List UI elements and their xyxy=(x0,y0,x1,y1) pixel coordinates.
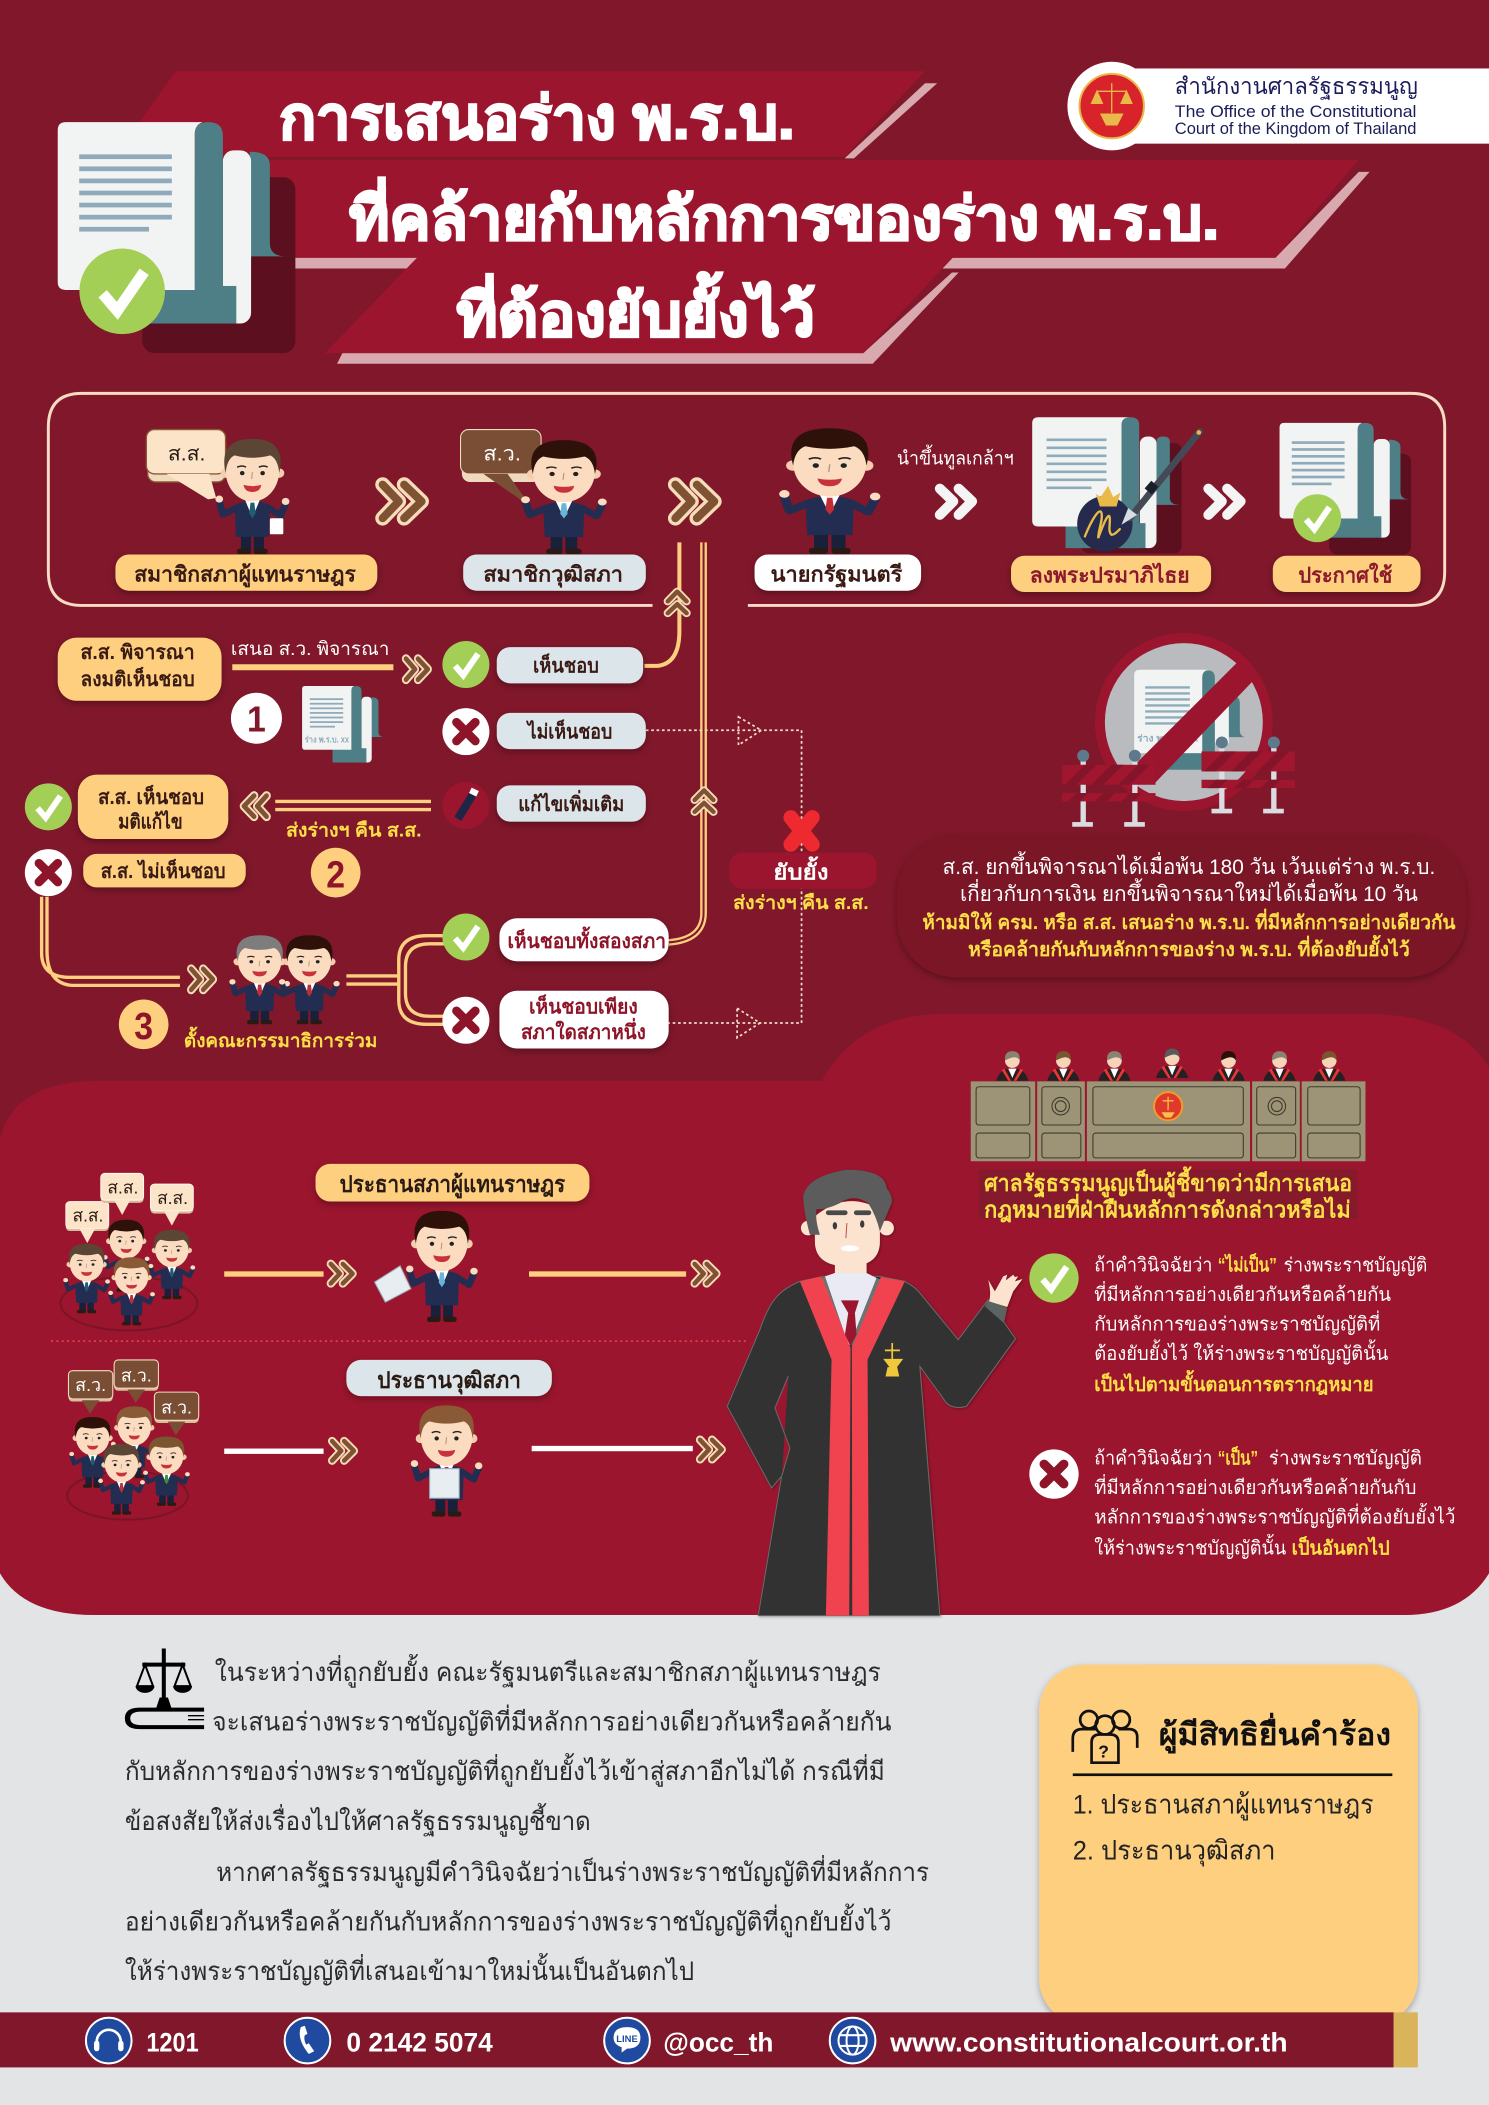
card: who may petition: 2. ประธานวุฒิสภา xyxy=(1073,1835,1276,1866)
step 1: House approves xyxy=(58,638,222,701)
step: senator with speech bubble: ส.ว. xyxy=(483,443,521,465)
contact: website xyxy=(830,2018,1288,2063)
logo: Office of the Constitutional Court xyxy=(1067,62,1489,150)
card: who may petition xyxy=(1039,1665,1418,2024)
title text: ที่คล้ายกับหลักการของร่าง พ.ร.บ. xyxy=(349,177,1219,252)
step 2: return to House: ส.ส. ไม่เห็นชอบ xyxy=(101,858,226,883)
body text xyxy=(125,1654,929,1986)
House president xyxy=(316,1164,589,1322)
group: Senators: ส.ว. xyxy=(75,1375,106,1395)
icon: people with question marks: ? xyxy=(1098,1741,1109,1761)
icon: promulgated document xyxy=(1280,423,1411,554)
outcomes: approve / disapprove / amend: แก้ไขเพิ่มเติม xyxy=(518,789,624,816)
contact: hotline xyxy=(86,2018,199,2063)
dotted veto lines xyxy=(646,717,802,1038)
number 1 xyxy=(231,693,282,744)
step 2: return to House: มติแก้ไข xyxy=(118,809,183,833)
group: Senators: ส.ว. xyxy=(121,1365,152,1385)
step 2: return to House: ส.ส. เห็นชอบ xyxy=(98,784,204,809)
verdict: is a similar bill: ให้ร่างพระราชบัญญัตินั้น xyxy=(1094,1534,1286,1560)
arrow: Senate president to court xyxy=(532,1440,722,1459)
step: senator with speech bubble xyxy=(461,430,607,554)
committee outcomes: สภาใดสภาหนึ่ง xyxy=(521,1017,646,1044)
verdict: not a similar bill: กับหลักการของร่างพระราชบัญญัติที่ xyxy=(1094,1310,1380,1335)
dark red panel: constitutional court xyxy=(0,1014,1489,1615)
step 2: return to House: ส่งร่างฯ คืน ส.ส. xyxy=(286,819,422,840)
outcomes: approve / disapprove / amend xyxy=(442,641,646,829)
step: prime minister xyxy=(779,428,880,554)
group: House members: ส.ส. xyxy=(107,1177,138,1197)
body text: ให้ร่างพระราชบัญญัติที่เสนอเข้ามาใหม่นั้นเป็นอันตกไป xyxy=(125,1953,694,1986)
title banners xyxy=(114,71,1370,364)
verdict: is a similar bill: เป็นอันตกไป xyxy=(1292,1536,1390,1560)
icon: blocked bill with barriers xyxy=(1062,638,1295,827)
group: House members: ส.ส. xyxy=(73,1206,103,1226)
verdict: is a similar bill: ที่มีหลักการอย่างเดียวกันหรือคล้ายกันกับ xyxy=(1094,1474,1416,1499)
outcomes: approve / disapprove / amend: ไม่เห็นชอบ xyxy=(526,718,612,743)
verdict: is a similar bill: “เป็น” xyxy=(1218,1446,1258,1470)
step pill labels xyxy=(134,562,1393,588)
logo: Office of the Constitutional Court: Court of the Kingdom of Thailand xyxy=(1175,119,1416,138)
contact: LINE xyxy=(604,2018,773,2063)
step pill labels: ลงพระปรมาภิไธย xyxy=(1030,563,1190,588)
panel: 180-day rule: เกี่ยวกับการเงิน ยกขึ้นพิจารณาใหม่ได้เมื่อพ้น 10 วัน xyxy=(960,878,1418,906)
judge xyxy=(727,1170,1023,1616)
committee outcomes: เห็นชอบทั้งสองสภา xyxy=(508,926,666,953)
group: House members xyxy=(60,1173,197,1330)
contact: phone xyxy=(285,2018,493,2063)
verdict: not a similar bill: ต้องยับยั้งไว้ ให้ร่างพระราชบัญญัตินั้น xyxy=(1094,1339,1388,1365)
panel: 180-day rule xyxy=(897,835,1466,977)
verdict: not a similar bill: “ไม่เป็น” xyxy=(1218,1252,1277,1276)
contact: hotline: 1201 xyxy=(146,2027,199,2057)
text: court decides xyxy=(979,1166,1357,1223)
icon: small bill document: ร่าง พ.ร.บ. xx xyxy=(305,734,349,744)
court bench with judges xyxy=(971,1048,1365,1161)
logo: Office of the Constitutional Court: The Office of the Constitutional xyxy=(1175,102,1416,121)
verdict: is a similar bill: ร่างพระราชบัญญัติ xyxy=(1269,1448,1422,1470)
light bottom background xyxy=(0,1517,1489,2105)
panel: 180-day rule: หรือคล้ายกันกับหลักการของร่าง พ.ร.บ. ที่ต้องยับยั้งไว้ xyxy=(968,934,1410,961)
card: who may petition: 1. ประธานสภาผู้แทนราษฎร xyxy=(1073,1790,1374,1821)
body text: จะเสนอร่างพระราชบัญญัติที่มีหลักการอย่างเดียวกันหรือคล้ายกัน xyxy=(212,1704,892,1736)
arrow: Senators to Senate president xyxy=(224,1441,354,1461)
text: propose to Senate: เสนอ ส.ว. พิจารณา xyxy=(231,638,389,659)
icon: small bill document xyxy=(302,686,384,763)
body text: หากศาลรัฐธรรมนูญมีคำวินิจฉัยว่าเป็นร่างพระราชบัญญัติที่มีหลักการ xyxy=(216,1855,929,1888)
step 1: House approves: ลงมติเห็นชอบ xyxy=(81,666,195,691)
icon: blocked bill with barriers: ร่าง พ.ร.บ. xx xyxy=(1137,733,1199,743)
committee outcomes xyxy=(442,914,669,1048)
panel: 180-day rule: ส.ส. ยกขึ้นพิจารณาได้เมื่อพ้น 180 วัน เว้นแต่ร่าง พ.ร.บ. xyxy=(943,851,1435,879)
verdict: not a similar bill: เป็นไปตามขั้นตอนการตรากฎหมาย xyxy=(1094,1369,1374,1396)
step 3: joint committee: ตั้งคณะกรรมาธิการร่วม xyxy=(184,1026,377,1051)
step 1: House approves: ส.ส. พิจารณา xyxy=(81,642,195,664)
contact: LINE: @occ_th xyxy=(663,2027,773,2057)
verdict: is a similar bill: หลักการของร่างพระราชบัญญัติที่ต้องยับยั้งไว้ xyxy=(1094,1503,1455,1529)
House president: ประธานสภาผู้แทนราษฎร xyxy=(340,1171,566,1199)
contact: phone: 0 2142 5074 xyxy=(346,2027,493,2057)
icon: scales on book xyxy=(125,1649,204,1729)
body text: อย่างเดียวกันหรือคล้ายกันกับหลักการของร่างพระราชบัญญัติที่ถูกยับยั้งไว้ xyxy=(125,1903,892,1937)
verdict: not a similar bill xyxy=(1029,1252,1427,1396)
verdict: not a similar bill: ที่มีหลักการอย่างเดียวกันหรือคล้ายกัน xyxy=(1094,1281,1391,1306)
body text: ในระหว่างที่ถูกยับยั้ง คณะรัฐมนตรีและสมาชิกสภาผู้แทนราษฎร xyxy=(215,1654,881,1688)
number 1: 1 xyxy=(247,699,266,740)
veto block: ส่งร่างฯ คืน ส.ส. xyxy=(733,892,869,913)
contact: website: www.constitutionalcourt.or.th xyxy=(889,2027,1288,2057)
footer bar xyxy=(0,2012,1418,2067)
dotted divider xyxy=(51,1340,749,1342)
verdict: is a similar bill: ถ้าคำวินิจฉัยว่า xyxy=(1094,1448,1212,1470)
committee outcomes: เห็นชอบเพียง xyxy=(529,994,638,1019)
group: House members: ส.ส. xyxy=(157,1188,188,1208)
group: Senators xyxy=(67,1360,199,1520)
chevrons xyxy=(383,485,422,518)
arrow: House president to court xyxy=(529,1264,716,1283)
arrow: House members to House president xyxy=(224,1264,353,1283)
verdict: not a similar bill: ถ้าคำวินิจฉัยว่า xyxy=(1094,1254,1212,1276)
panel: 180-day rule: ห้ามมิให้ ครม. หรือ ส.ส. เสนอร่าง พ.ร.บ. ที่มีหลักการอย่างเดียวกัน xyxy=(922,908,1456,934)
verdict: is a similar bill xyxy=(1029,1446,1455,1560)
chevrons on connectors xyxy=(191,592,713,990)
step pill labels: สมาชิกวุฒิสภา xyxy=(483,562,623,588)
icon: people with question marks xyxy=(1073,1711,1137,1763)
chevrons xyxy=(675,485,714,518)
white chevrons xyxy=(940,489,972,515)
step pill labels: ประกาศใช้ xyxy=(1298,562,1393,588)
Senate president: ประธานวุฒิสภา xyxy=(377,1367,521,1395)
body text: กับหลักการของร่างพระราชบัญญัติที่ถูกยับยั้งไว้เข้าสู่สภาอีกไม่ได้ กรณีที่มี xyxy=(125,1753,885,1787)
contact: LINE: LINE xyxy=(616,2034,638,2044)
icon: document with check xyxy=(58,122,295,353)
title text: ที่ต้องยับยั้งไว้ xyxy=(457,272,815,349)
verdict: not a similar bill: ร่างพระราชบัญญัติ xyxy=(1284,1254,1427,1276)
veto block xyxy=(729,818,877,913)
step 3: joint committee xyxy=(119,935,377,1051)
body text: ข้อสงสัยให้ส่งเรื่องไปให้ศาลรัฐธรรมนูญชี้ขาด xyxy=(125,1803,591,1837)
card: who may petition: ผู้มีสิทธิยื่นคำร้อง xyxy=(1159,1712,1391,1754)
Senate president xyxy=(346,1360,552,1517)
step: member of House with speech bubble xyxy=(146,430,289,554)
text: court decides: กฎหมายที่ฝ่าฝืนหลักการดังกล่าวหรือไม่ xyxy=(984,1194,1351,1223)
process box xyxy=(48,393,1445,605)
step 3: joint committee: 3 xyxy=(134,1005,153,1047)
logo: Office of the Constitutional Court: สำนักงานศาลรัฐธรรมนูญ xyxy=(1175,73,1418,100)
label: royal submission: นำขึ้นทูลเกล้าฯ xyxy=(897,444,1014,469)
step: member of House with speech bubble: ส.ส. xyxy=(168,443,205,465)
step pill labels: สมาชิกสภาผู้แทนราษฎร xyxy=(134,562,356,588)
title text: การเสนอร่าง พ.ร.บ. xyxy=(279,85,795,151)
group: Senators: ส.ว. xyxy=(161,1398,192,1418)
white chevrons xyxy=(1208,489,1241,515)
step pill labels: นายกรัฐมนตรี xyxy=(771,562,903,588)
title text xyxy=(279,85,1219,349)
text: court decides: ศาลรัฐธรรมนูญเป็นผู้ชี้ขาดว่ามีการเสนอ xyxy=(984,1166,1352,1198)
veto block: ยับยั้ง xyxy=(773,855,828,884)
icon: royal assent document xyxy=(1032,417,1201,553)
step pills xyxy=(115,554,1421,592)
connectors xyxy=(42,542,704,1024)
step 2: return to House: 2 xyxy=(326,853,345,895)
outcomes: approve / disapprove / amend: เห็นชอบ xyxy=(533,653,599,678)
step 2: return to House xyxy=(25,775,422,897)
